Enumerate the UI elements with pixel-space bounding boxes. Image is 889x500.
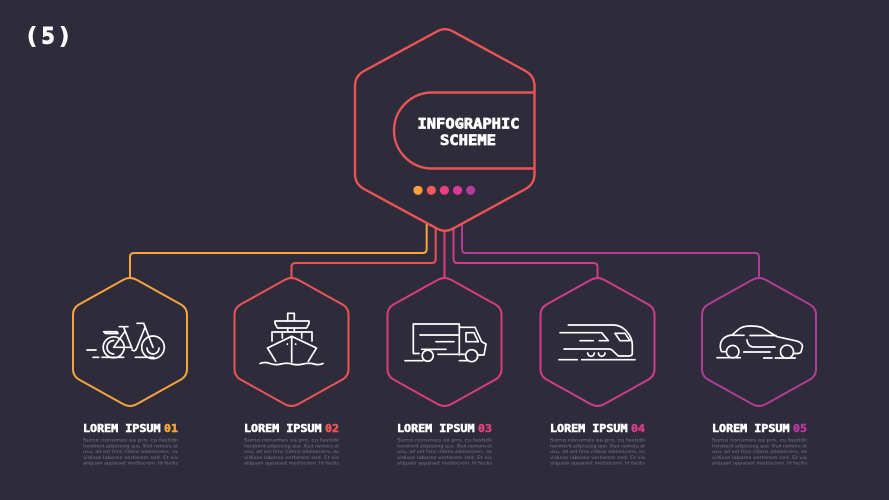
heading 01: LOREM IPSUM bbox=[83, 423, 160, 435]
hexagon outline bbox=[540, 278, 654, 406]
body 03: hendrerit adipiscing quo. Illud nemore et bbox=[397, 443, 492, 449]
body 03 bbox=[397, 438, 493, 466]
body 05 bbox=[712, 438, 808, 466]
slide number: (5) bbox=[25, 24, 71, 50]
number 01: 01 bbox=[164, 423, 178, 435]
body 01: vidisse labores verterem sed. Et vix bbox=[83, 455, 178, 461]
main hexagon outline bbox=[355, 29, 534, 231]
hexagon 05: car bbox=[702, 278, 816, 406]
icon: bicycle bbox=[87, 323, 164, 359]
body 02: vidisse labores verterem sed. Et vix bbox=[244, 455, 339, 461]
body 02: hendrerit adipiscing quo. Illud nemore et bbox=[244, 443, 339, 449]
hexagon outline bbox=[234, 278, 348, 406]
body 04 bbox=[550, 438, 646, 466]
connector 02 bbox=[292, 228, 436, 279]
body 05: hendrerit adipiscing quo. Illud nemore et bbox=[712, 443, 807, 449]
body 02: usu, ad est hinc ridens adolescens, ex bbox=[244, 449, 339, 455]
body 03: aliquam apparaet mediocrem. Id facilis bbox=[397, 460, 493, 466]
connector 01 bbox=[130, 223, 427, 279]
text block 04 bbox=[550, 423, 646, 466]
body 03: usu, ad est hinc ridens adolescens, ex bbox=[397, 449, 492, 455]
heading 02: LOREM IPSUM bbox=[244, 423, 322, 435]
icon: ship bbox=[260, 313, 323, 365]
body 02 bbox=[244, 438, 340, 466]
number 05: 05 bbox=[793, 423, 807, 435]
connector 05 bbox=[462, 224, 759, 279]
body 05: vidisse labores verterem sed. Et vix bbox=[712, 455, 807, 461]
body 04: aliquam apparaet mediocrem. Id facilis bbox=[550, 460, 646, 466]
icon: train bbox=[559, 325, 635, 360]
body 03: vidisse labores verterem sed. Et vix bbox=[397, 455, 492, 461]
body 05: Sumo nonumes ea pro, cu fastidii bbox=[712, 438, 807, 444]
hexagon 03: truck bbox=[388, 278, 502, 406]
number 02: 02 bbox=[325, 423, 339, 435]
text block 02 bbox=[244, 423, 340, 466]
body 05: usu, ad est hinc ridens adolescens, ex bbox=[712, 449, 807, 455]
body 04: hendrerit adipiscing quo. Illud nemore et bbox=[550, 443, 645, 449]
body 01: Sumo nonumes ea pro, cu fastidii bbox=[83, 438, 178, 444]
hexagon 04: train bbox=[540, 278, 654, 406]
body 02: Sumo nonumes ea pro, cu fastidii bbox=[244, 438, 339, 444]
body 01: aliquam apparaet mediocrem. Id facilis bbox=[83, 460, 179, 466]
body 04: usu, ad est hinc ridens adolescens, ex bbox=[550, 449, 645, 455]
title: SCHEME bbox=[440, 133, 496, 149]
title bbox=[418, 117, 520, 149]
connectors bbox=[130, 223, 759, 279]
text block 01 bbox=[83, 423, 179, 466]
text block 05 bbox=[712, 423, 808, 466]
icon: truck bbox=[405, 324, 486, 362]
body 01 bbox=[83, 438, 179, 466]
hexagon 01: bicycle bbox=[73, 278, 187, 406]
body 01: hendrerit adipiscing quo. Illud nemore et bbox=[83, 443, 178, 449]
number 04: 04 bbox=[631, 423, 645, 435]
connector 04 bbox=[454, 228, 598, 279]
body 03: Sumo nonumes ea pro, cu fastidii bbox=[397, 438, 492, 444]
hexagon outline bbox=[702, 278, 816, 406]
hexagon outline bbox=[73, 278, 187, 406]
body 05: aliquam apparaet mediocrem. Id facilis bbox=[712, 460, 808, 466]
body 01: usu, ad est hinc ridens adolescens, ex bbox=[83, 449, 178, 455]
hexagon 02: ship bbox=[234, 278, 348, 406]
title tab bbox=[394, 92, 534, 168]
icon: car bbox=[717, 326, 802, 358]
hexagon outline bbox=[388, 278, 502, 406]
number 03: 03 bbox=[478, 423, 492, 435]
title: INFOGRAPHIC bbox=[418, 117, 520, 133]
connector 03 bbox=[444, 232, 446, 279]
body 04: Sumo nonumes ea pro, cu fastidii bbox=[550, 438, 645, 444]
body 04: vidisse labores verterem sed. Et vix bbox=[550, 455, 645, 461]
main hexagon panel bbox=[355, 29, 534, 231]
heading 04: LOREM IPSUM bbox=[550, 423, 628, 435]
text block 03 bbox=[397, 423, 493, 466]
colour dots bbox=[413, 186, 475, 195]
heading 03: LOREM IPSUM bbox=[397, 423, 474, 435]
heading 05: LOREM IPSUM bbox=[712, 423, 790, 435]
body 02: aliquam apparaet mediocrem. Id facilis bbox=[244, 460, 340, 466]
